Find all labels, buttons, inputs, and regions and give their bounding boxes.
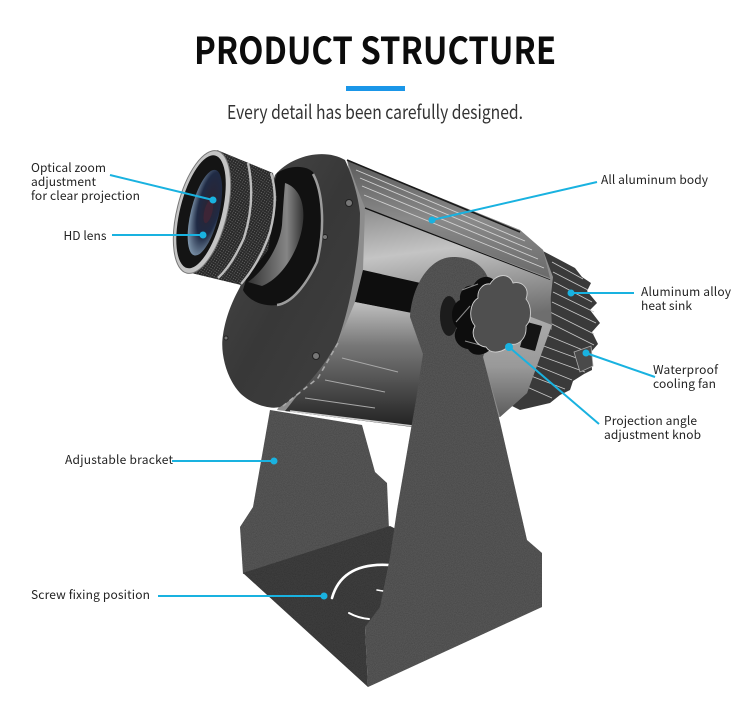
callout: adjustable bracket xyxy=(65,451,278,468)
base screw slots xyxy=(332,565,390,619)
callout: aluminum body xyxy=(428,171,709,224)
callout: screw fixing: Screw fixing position xyxy=(31,586,150,603)
disc edge highlight xyxy=(283,343,338,406)
callout: adjustable bracket: Adjustable bracket xyxy=(65,451,173,468)
aluminum body xyxy=(277,160,553,427)
callout: cooling fan: Waterproof xyxy=(653,361,719,378)
callout: heat sink xyxy=(568,283,732,314)
callout: aluminum body: All aluminum body xyxy=(601,171,709,188)
callout: optical zoom: Optical zoom xyxy=(31,159,106,176)
callout: heat sink: heat sink xyxy=(641,297,692,314)
body rear side xyxy=(483,305,552,417)
lens front ring xyxy=(163,145,241,279)
lens neck xyxy=(243,167,323,305)
disc screws xyxy=(224,200,352,360)
callout: angle knob: adjustment knob xyxy=(604,426,701,443)
rear bracket plate xyxy=(240,410,389,574)
callout: screw fixing xyxy=(31,586,328,603)
accent bar xyxy=(346,86,405,91)
callout: heat sink: Aluminum alloy xyxy=(641,283,732,300)
heat sink fins xyxy=(500,250,600,410)
bracket base floor xyxy=(243,526,396,687)
body light band xyxy=(363,209,552,330)
subtitle: Every detail has been carefully designed. xyxy=(227,98,523,125)
lens barrel xyxy=(187,150,277,285)
projector illustration xyxy=(163,145,600,687)
callout: optical zoom xyxy=(31,159,216,204)
title: PRODUCT STRUCTURE xyxy=(194,21,556,75)
body lower ribs xyxy=(285,302,424,427)
callout: cooling fan xyxy=(582,350,719,392)
body top fins xyxy=(347,160,550,278)
front bracket plate xyxy=(365,257,542,687)
adjustment knob xyxy=(440,276,530,355)
callout: HD lens: HD lens xyxy=(64,227,107,244)
callout: optical zoom: for clear projection xyxy=(31,187,140,204)
callout: cooling fan: cooling fan xyxy=(653,375,716,392)
callout: optical zoom: adjustment xyxy=(31,173,96,190)
callout: angle knob xyxy=(505,343,701,443)
body shadow window xyxy=(355,270,425,313)
front disc xyxy=(222,154,360,408)
callout: angle knob: Projection angle xyxy=(604,412,697,429)
callout: HD lens xyxy=(64,227,206,244)
